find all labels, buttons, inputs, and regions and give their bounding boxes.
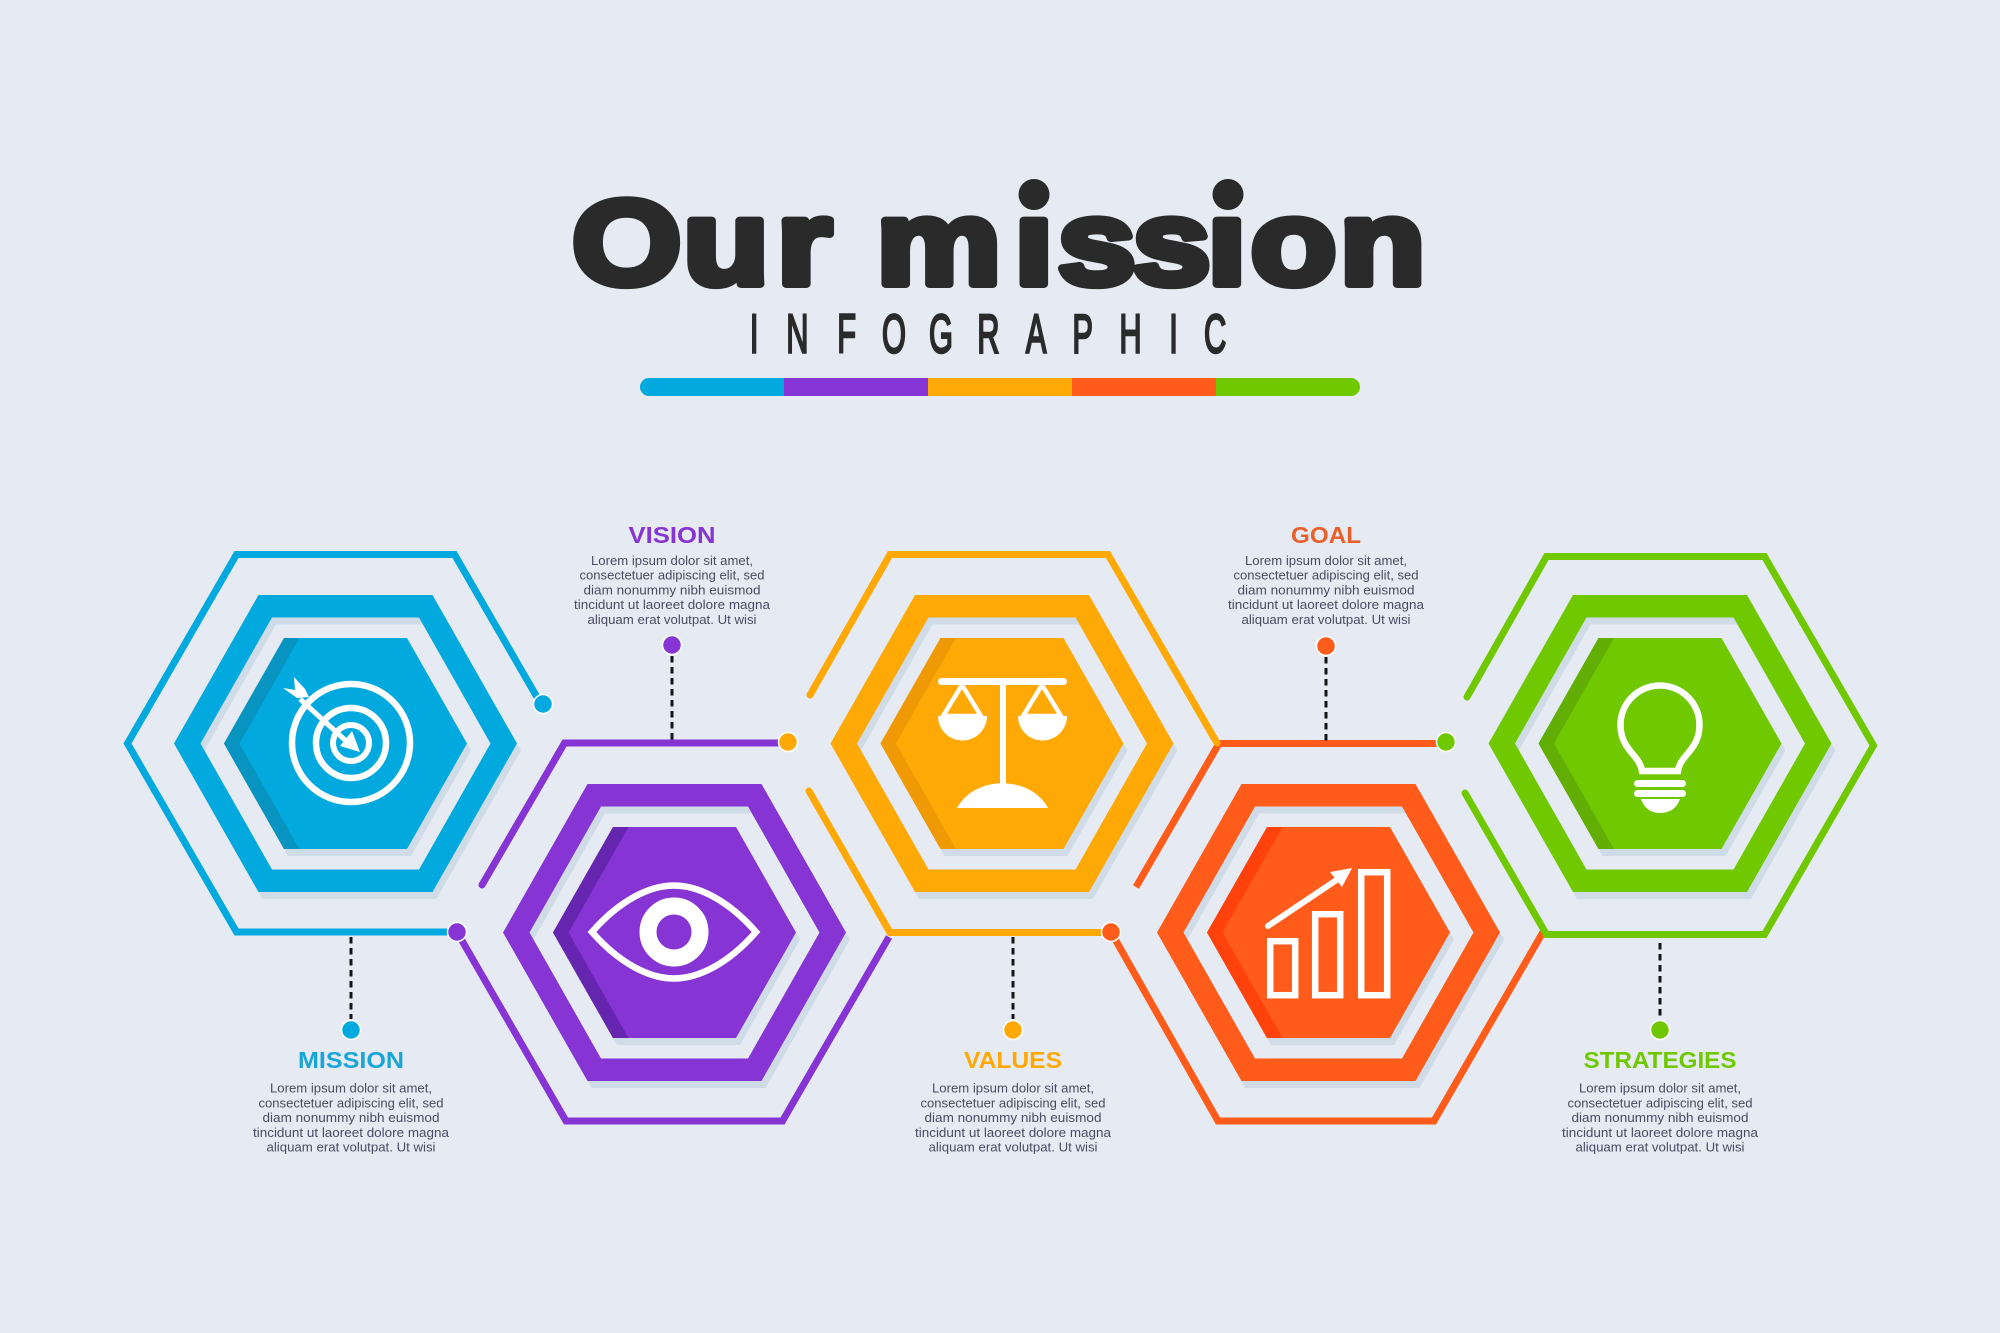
outline: blue	[128, 554, 541, 932]
text block: strategies	[1562, 1047, 1759, 1154]
text block: mission: aliquam erat volutpat. Ut wisi	[266, 1140, 436, 1154]
connector dots	[342, 636, 1670, 1040]
icon: eye	[592, 886, 756, 978]
outline: green	[1465, 556, 1874, 934]
icon: growth chart	[1268, 868, 1387, 995]
subtitle: INFOGRAPHIC	[750, 305, 1226, 365]
text block: vision: tincidunt ut laoreet dolore magna	[574, 597, 771, 612]
title: Our mission	[572, 176, 1425, 310]
outline: orange upper	[810, 554, 1217, 743]
text block: vision: Lorem ipsum dolor sit amet,	[591, 553, 753, 568]
text block: vision: consectetuer adipiscing elit, sed	[580, 568, 764, 583]
text block: strategies: diam nonummy nibh euismod	[1572, 1110, 1748, 1125]
text block: vision: diam nonummy nibh euismod	[584, 582, 760, 597]
text block: mission: consectetuer adipiscing elit, sed	[258, 1095, 444, 1110]
panel: goal hexagon	[1157, 784, 1504, 1088]
text block: goal: consectetuer adipiscing elit, sed	[1234, 568, 1418, 583]
panel: strategies hexagon	[1488, 595, 1836, 899]
text block: strategies: consectetuer adipiscing elit, sed	[1568, 1095, 1752, 1110]
text block: goal: diam nonummy nibh euismod	[1238, 582, 1414, 597]
text block: values: Lorem ipsum dolor sit amet,	[932, 1081, 1094, 1096]
text block: goal: Lorem ipsum dolor sit amet,	[1245, 553, 1407, 568]
outline: orange lower	[809, 791, 1105, 932]
text block: strategies: tincidunt ut laoreet dolore magna	[1562, 1125, 1759, 1140]
outline: purple upper	[482, 743, 785, 885]
text block: strategies: aliquam erat volutpat. Ut wisi	[1576, 1140, 1745, 1154]
icon: target with arrow	[283, 677, 410, 802]
panel: mission hexagon	[174, 595, 521, 899]
text block: goal: GOAL	[1291, 522, 1361, 548]
text block: strategies: STRATEGIES	[1584, 1047, 1736, 1073]
connector outlines	[128, 554, 1874, 1121]
header	[572, 170, 1425, 396]
text block: values: consectetuer adipiscing elit, sed	[920, 1095, 1106, 1110]
panel: values hexagon	[830, 595, 1178, 899]
text block: vision	[574, 522, 771, 627]
outline: red lower	[1111, 932, 1543, 1121]
text block: mission: diam nonummy nibh euismod	[262, 1110, 440, 1125]
five colour bar	[640, 378, 1360, 396]
text block: values: tincidunt ut laoreet dolore magna	[915, 1125, 1112, 1140]
text block: strategies: Lorem ipsum dolor sit amet,	[1579, 1081, 1741, 1096]
icon: scales	[938, 678, 1067, 808]
dashed leader lines	[351, 656, 1660, 1019]
outline: red upper	[1136, 744, 1440, 887]
text block: mission: Lorem ipsum dolor sit amet,	[270, 1081, 432, 1096]
text block: goal	[1228, 522, 1425, 627]
icon: light bulb	[1620, 686, 1700, 813]
text block: vision: VISION	[628, 522, 716, 548]
panel: vision hexagon	[503, 784, 850, 1088]
text block: vision: aliquam erat volutpat. Ut wisi	[588, 612, 757, 627]
text block: values: aliquam erat volutpat. Ut wisi	[928, 1140, 1098, 1154]
text block: mission: tincidunt ut laoreet dolore magna	[253, 1125, 450, 1140]
text block: values: diam nonummy nibh euismod	[924, 1110, 1102, 1125]
text block: mission	[253, 1047, 450, 1154]
text block: goal: tincidunt ut laoreet dolore magna	[1228, 597, 1425, 612]
text block: mission: MISSION	[298, 1047, 404, 1073]
text block: goal: aliquam erat volutpat. Ut wisi	[1242, 612, 1411, 627]
text block: values: VALUES	[964, 1047, 1062, 1073]
text block: values	[915, 1047, 1112, 1154]
outline: purple lower	[457, 932, 889, 1121]
